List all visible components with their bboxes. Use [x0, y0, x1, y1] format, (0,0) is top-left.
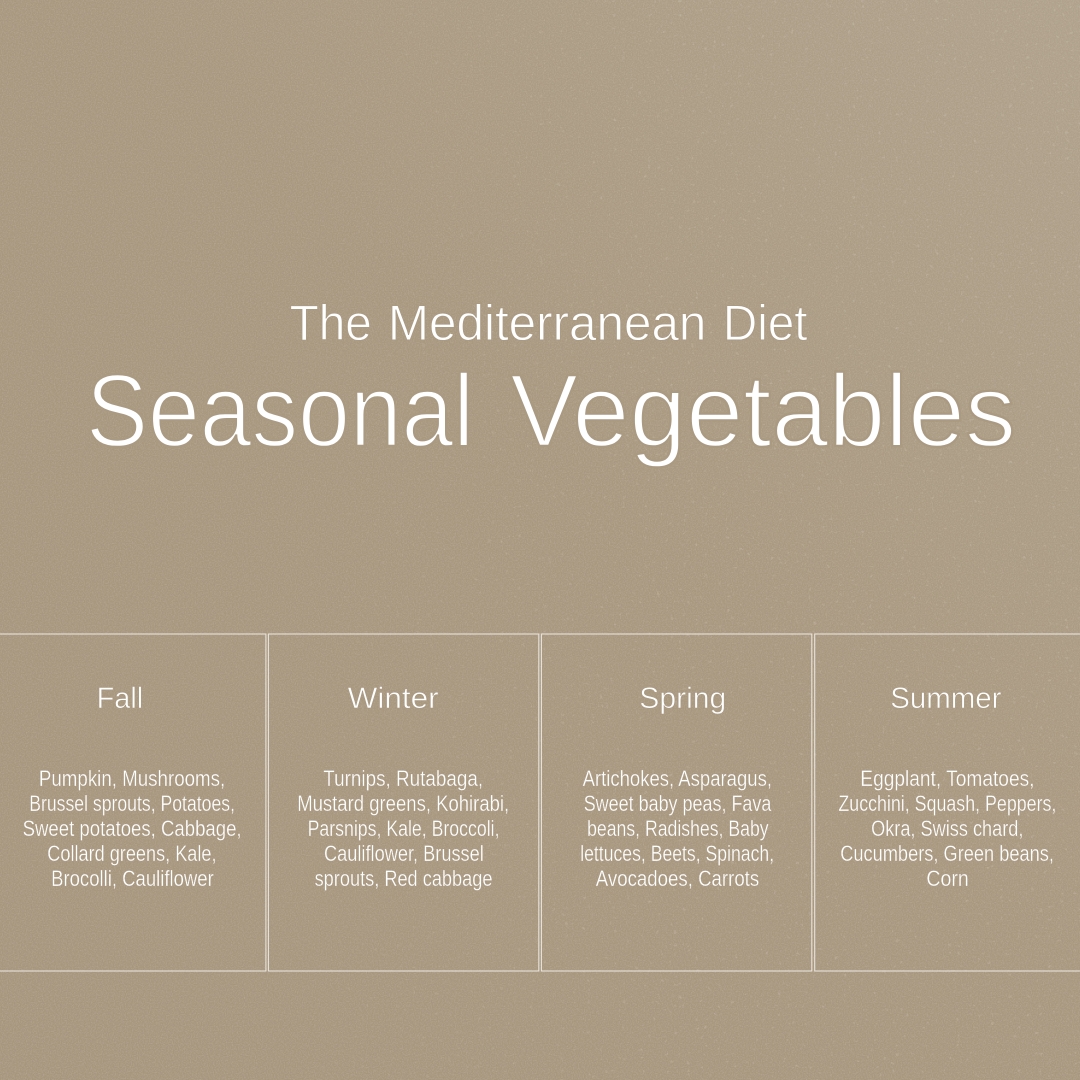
heading: fall: Fall	[97, 682, 143, 715]
vegetable list: summer	[838, 766, 1056, 891]
main title: Vegetables	[510, 353, 1016, 468]
vegetable list: summer: Okra, Swiss chard,	[871, 816, 1023, 841]
vegetable list: spring: beans, Radishes, Baby	[587, 816, 769, 841]
subtitle: Mediterranean	[388, 295, 706, 351]
vegetable list: fall	[23, 766, 242, 891]
vegetable list: winter: Cauliflower, Brussel	[324, 841, 484, 866]
vegetable list: fall: Sweet potatoes, Cabbage,	[23, 816, 242, 841]
vegetable list: winter: Turnips, Rutabaga,	[323, 766, 483, 791]
panel: winter	[268, 634, 539, 971]
vegetable list: spring	[580, 766, 774, 891]
panel: spring	[541, 634, 812, 971]
vegetable list: fall: Pumpkin, Mushrooms,	[39, 766, 225, 791]
panel: summer	[815, 634, 1080, 971]
vegetable list: fall: Brocolli, Cauliflower	[51, 866, 214, 891]
vegetable list: winter: sprouts, Red cabbage	[315, 866, 492, 891]
vegetable list: winter	[297, 766, 509, 891]
vegetable list: spring: Sweet baby peas, Fava	[584, 791, 772, 816]
heading: spring: Spring	[639, 682, 726, 715]
vegetable list: winter: Parsnips, Kale, Broccoli,	[308, 816, 500, 841]
vegetable list: summer: Corn	[926, 866, 969, 891]
main title: Seasonal	[86, 353, 474, 468]
subtitle: The	[290, 295, 372, 351]
heading: summer: Summer	[890, 682, 1002, 715]
vegetable list: summer: Eggplant, Tomatoes,	[860, 766, 1034, 791]
title block	[86, 295, 1016, 468]
vegetable list: spring: Artichokes, Asparagus,	[583, 766, 772, 791]
vegetable list: winter: Mustard greens, Kohirabi,	[297, 791, 509, 816]
vegetable list: spring: Avocadoes, Carrots	[596, 866, 759, 891]
heading: winter: Winter	[348, 682, 439, 715]
vegetable list: fall: Brussel sprouts, Potatoes,	[29, 791, 235, 816]
subtitle: Diet	[723, 295, 808, 351]
vegetable list: fall: Collard greens, Kale,	[47, 841, 216, 866]
vegetable list: spring: lettuces, Beets, Spinach,	[580, 841, 774, 866]
panel: fall	[0, 634, 266, 971]
